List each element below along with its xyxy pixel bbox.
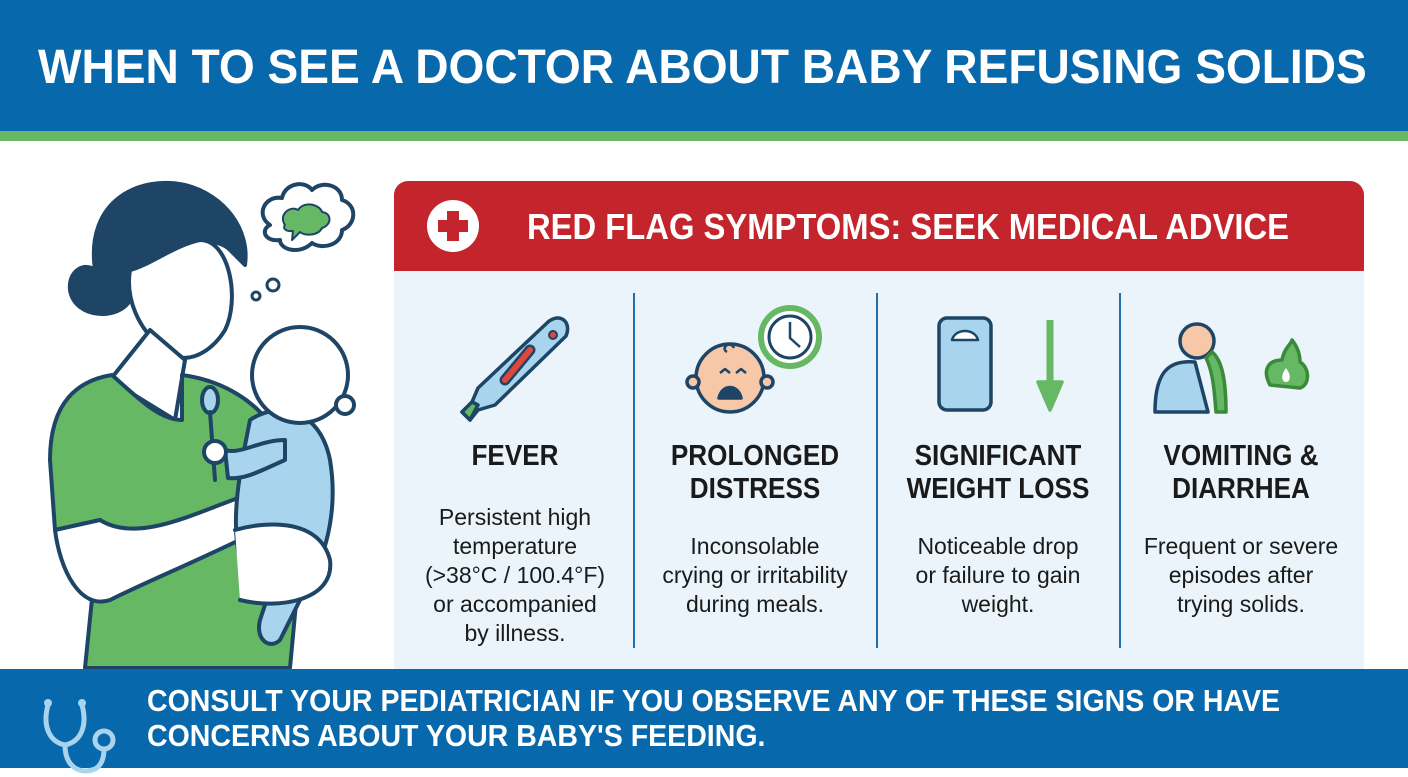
panel header bbox=[394, 181, 1364, 271]
neck bbox=[110, 330, 185, 420]
column: prolonged distress: DISTRESS bbox=[690, 473, 820, 505]
column: prolonged distress: PROLONGED bbox=[671, 440, 839, 472]
holding arm lower bbox=[235, 524, 330, 604]
icon: stethoscope bbox=[43, 699, 116, 774]
column: fever: temperature bbox=[453, 533, 577, 559]
face bbox=[129, 240, 232, 358]
icon: scale with arrow bbox=[939, 318, 1062, 410]
column: prolonged distress: Inconsolable bbox=[690, 533, 820, 559]
column: vomiting & diarrhea: DIARRHEA bbox=[1172, 473, 1310, 505]
column: weight loss: WEIGHT LOSS bbox=[907, 473, 1089, 505]
column: fever: (>38°C / 100.4°F) bbox=[425, 562, 605, 588]
column: vomiting & diarrhea: Frequent or severe bbox=[1144, 533, 1338, 559]
shirt bbox=[50, 375, 300, 668]
icon: medical cross bbox=[427, 200, 479, 252]
hair bbox=[70, 183, 246, 314]
header bar bbox=[0, 0, 1408, 131]
column: weight loss: Noticeable drop bbox=[917, 533, 1079, 559]
baby head bbox=[252, 327, 348, 423]
column: weight loss: SIGNIFICANT bbox=[915, 440, 1081, 472]
thought bubble bbox=[252, 184, 353, 300]
column: vomiting & diarrhea: VOMITING & bbox=[1163, 440, 1319, 472]
arm bbox=[55, 490, 277, 602]
column: fever bbox=[425, 440, 605, 646]
icons bbox=[460, 305, 1310, 422]
column: fever: by illness. bbox=[464, 620, 565, 646]
column: weight loss: or failure to gain bbox=[916, 562, 1080, 588]
footer message: CONSULT YOUR PEDIATRICIAN IF YOU OBSERVE ANY OF THESE SIGNS OR HAVE bbox=[147, 683, 1280, 718]
illustration: mother holding baby bbox=[48, 180, 356, 669]
column: prolonged distress: during meals. bbox=[686, 591, 824, 617]
column: vomiting & diarrhea: trying solids. bbox=[1177, 591, 1305, 617]
spoon bbox=[202, 387, 218, 413]
column: fever: FEVER bbox=[471, 440, 559, 472]
baby body bbox=[236, 410, 333, 644]
title: WHEN TO SEE A DOCTOR ABOUT BABY REFUSING SOLIDS bbox=[38, 41, 1367, 94]
footer message bbox=[147, 683, 1280, 753]
icon: thermometer bbox=[462, 318, 568, 420]
column: prolonged distress: crying or irritability bbox=[662, 562, 848, 588]
panel: red flag symptoms bbox=[394, 181, 1364, 670]
icon: crying baby with clock bbox=[687, 308, 819, 412]
footer bbox=[0, 669, 1408, 768]
baby arm bbox=[225, 440, 285, 478]
column: fever: or accompanied bbox=[433, 591, 597, 617]
column: fever: Persistent high bbox=[439, 504, 591, 530]
column: vomiting & diarrhea bbox=[1144, 440, 1338, 617]
column: vomiting & diarrhea: episodes after bbox=[1169, 562, 1313, 588]
panel heading: RED FLAG SYMPTOMS: SEEK MEDICAL ADVICE bbox=[527, 206, 1289, 247]
footer message: CONCERNS ABOUT YOUR BABY'S FEEDING. bbox=[147, 718, 765, 753]
icon: vomiting person bbox=[1155, 324, 1308, 412]
column: weight loss bbox=[906, 440, 1089, 617]
column: weight loss: weight. bbox=[962, 591, 1034, 617]
column: prolonged distress bbox=[662, 440, 848, 617]
